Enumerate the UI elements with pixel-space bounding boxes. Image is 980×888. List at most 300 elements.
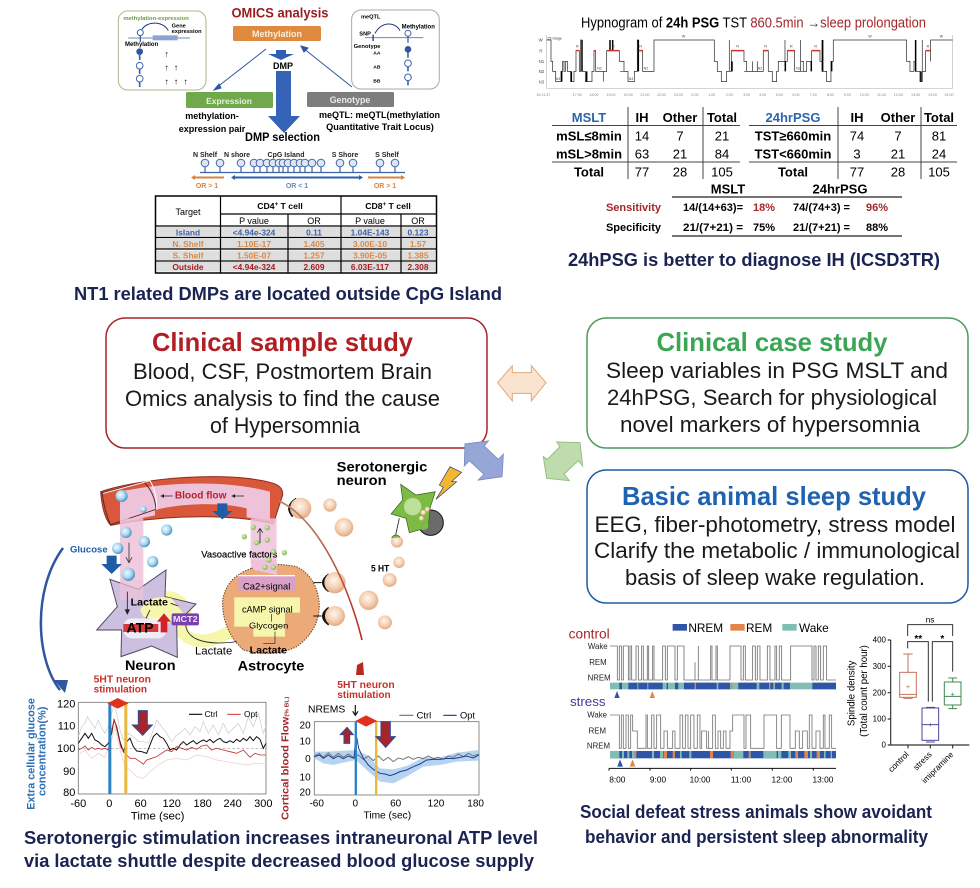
chart: extracellular glucose: 80 (63, 787, 75, 799)
diagram: CpG lollipops: OR > 1 (196, 183, 218, 190)
chart: 24h hypnogram: 23:00 (674, 93, 683, 97)
table: MSLT: mSL≤8min (556, 128, 622, 144)
box: Genotype (307, 92, 394, 107)
table: 24hrPSG: IH (850, 110, 864, 125)
chart: cortical blood flow: 10 (300, 736, 311, 747)
table: 24hrPSG: 21 (891, 146, 905, 162)
chart: extracellular glucose: 100 (57, 743, 75, 755)
chart: spindle density box plot: 200 (873, 688, 887, 697)
table: CpG target odds ratios: 1.10E-17 (237, 239, 271, 249)
chart: 24h hypnogram: 9:00 (844, 93, 851, 97)
table: sensitivity and specificity: 18% (753, 202, 775, 214)
astrocyte: cAMP signal (242, 605, 293, 615)
chart: 24h hypnogram: 15:11:37 (536, 93, 550, 97)
table: 24hrPSG: 24hrPSG (766, 110, 820, 125)
chart: 24h hypnogram: 15:00 (944, 93, 954, 97)
time axis: 10:00 (690, 775, 711, 785)
table: 24hrPSG: 28 (891, 164, 905, 180)
inset: methylation-expression: Methylation (125, 42, 159, 48)
table: MSLT: 28 (673, 164, 687, 180)
table: CpG target odds ratios: 1.257 (304, 250, 325, 260)
table: sensitivity and specificity: 24hrPSG (813, 182, 867, 196)
inset: methylation-expression: ↑ (164, 49, 169, 59)
axis labels: NREM (588, 673, 611, 682)
caption: NT1 DMPs: NT1 related DMPs are located outside CpG Island (74, 284, 502, 304)
inset: methylation-expression (118, 11, 206, 90)
arrow: DMP selection (268, 71, 300, 133)
chart: 24h hypnogram: 14:00 (928, 93, 937, 97)
table: sensitivity and specificity: Specificity (606, 222, 662, 234)
legend (673, 621, 829, 635)
diagram: CpG lollipops: OR > 1 (374, 183, 396, 190)
chart: 24h hypnogram: 10:00 (860, 93, 869, 97)
panel: basic animal sleep study: Clarify the metabolic / immunological (594, 538, 960, 563)
axis labels: REM (589, 727, 606, 736)
chart: spindle density box plot (847, 615, 969, 785)
chart: 24h hypnogram: R (790, 44, 793, 48)
table: MSLT: 21 (715, 128, 729, 144)
panel: clinical sample study: of Hypersomnia (210, 413, 361, 438)
table: MSLT: mSL>8min (556, 146, 622, 162)
y axis title: Extra cellular glucose (26, 698, 38, 810)
panel: clinical case study: novel markers of hypersomnia (620, 412, 921, 437)
table: CpG target odds ratios: OR (307, 216, 321, 226)
inset: meQTL: AB (373, 65, 381, 71)
chart: 24h hypnogram: R (539, 48, 542, 53)
arrow: orange double (498, 366, 546, 401)
table: MSLT: 77 (635, 164, 649, 180)
table: CpG target odds ratios: T cell (278, 201, 303, 211)
table: 24hrPSG: 7 (894, 128, 902, 144)
table: CpG target odds ratios: <4.94e-324 (233, 262, 276, 272)
chart: 24h hypnogram: 17:00 (573, 93, 582, 97)
chart: extracellular glucose: 60 (135, 798, 147, 810)
label: 5HT stimulation (337, 680, 395, 701)
chart: spindle density box plot: 100 (873, 715, 887, 724)
chart: cortical blood flow: 120 (428, 799, 445, 810)
chart: extracellular glucose: Ctrl (205, 709, 218, 719)
diagram: CpG lollipops: S Shore (332, 152, 358, 159)
inset: meQTL: Genotype (354, 44, 381, 50)
table: 24hrPSG: 77 (850, 164, 864, 180)
chart: cortical blood flow (281, 680, 484, 821)
table: CpG target odds ratios: + (383, 202, 387, 208)
table: sensitivity and specificity: 88% (866, 222, 888, 234)
time axis (609, 768, 836, 785)
legend: NREM (688, 621, 723, 635)
chart: spindle density box plot: + (951, 689, 955, 698)
table: 24hrPSG: 81 (932, 128, 946, 144)
chart: extracellular glucose: 120 (162, 798, 181, 810)
box: Methylation (233, 26, 321, 41)
chart: 24h hypnogram: 3:00 (743, 93, 750, 97)
chart: cortical blood flow: Ctrl (417, 710, 431, 720)
caption: 24hPSG: 24hPSG is better to diagnose IH (ICSD3TR) (568, 250, 940, 270)
chart: 24h hypnogram: N2 (644, 66, 648, 70)
label: control: control (569, 627, 610, 642)
label: 5HT stimulation: stimulation (337, 690, 391, 701)
neuron: ATP (127, 620, 153, 636)
y axis title: concentration(%) (37, 706, 49, 796)
chart: spindle density box plot: imipramine (920, 749, 956, 785)
chart: 24h hypnogram: 25 Stage (547, 36, 562, 40)
chart: 24h hypnogram: R (612, 44, 615, 48)
table: CpG target odds ratios: CD4 (257, 201, 275, 211)
label: 5HT stimulation (94, 675, 151, 695)
axis labels: NREM (587, 742, 610, 751)
table: sensitivity and specificity: 14/(14+63)= (683, 202, 743, 214)
table: MSLT: Other (663, 110, 697, 125)
panel: clinical sample study: Clinical sample study (152, 327, 414, 357)
chart: 24h hypnogram: R (814, 44, 817, 48)
table: 24hrPSG (749, 107, 957, 180)
inset: meQTL: AA (373, 50, 381, 56)
chart: 24h hypnogram: W (539, 38, 544, 43)
panel: clinical case study: Clinical case study (656, 327, 888, 357)
caption: social defeat stress: behavior and persistent sleep abnormality (585, 827, 929, 847)
blood vessel: Blood flow (175, 490, 227, 501)
chart: 24h hypnogram: R (576, 44, 579, 48)
inset: meQTL: BB (373, 79, 381, 85)
chart: spindle density box plot: + (928, 720, 932, 729)
chart: 24h hypnogram: 20:00 (624, 93, 633, 97)
chart: cortical blood flow: Time (sec) (363, 810, 411, 821)
axis labels (587, 642, 611, 751)
box: Methylation: Methylation (252, 29, 302, 39)
legend: REM (746, 621, 772, 635)
arc: glucose to chart (41, 548, 68, 693)
chart: 24h hypnogram: 18:00 (589, 93, 599, 97)
table: CpG target odds ratios: 1.385 (408, 250, 429, 260)
inset: methylation-expression: ↑ (164, 63, 169, 73)
chart: extracellular glucose: 240 (223, 798, 242, 810)
chart: cortical blood flow: 10 (300, 772, 311, 783)
neuron: Lactate (131, 598, 168, 609)
diagram: CpG lollipops: CpG Island (268, 152, 304, 159)
panel: clinical sample study: Blood, CSF, Postmortem Brain (133, 359, 432, 384)
yellow lactate shuttle (147, 597, 257, 641)
astrocyte: Lactate (250, 645, 287, 656)
chart: 24h hypnogram: 19:00 (606, 93, 616, 97)
chart: spindle density box plot: (Total count per hour) (859, 645, 870, 737)
panel: basic animal sleep study: Basic animal sleep study (622, 481, 927, 511)
table: 24hrPSG: TST≥660min (755, 128, 831, 144)
chart: 24h hypnogram: 8:00 (827, 93, 834, 97)
chart: 24h hypnogram: N2 (597, 66, 602, 70)
chart: extracellular glucose: Opt (244, 709, 258, 719)
time axis: 11:00 (731, 775, 751, 785)
chart: cortical blood flow: -60 (309, 799, 324, 810)
table: sensitivity and specificity: 21/(7+21) = (683, 222, 743, 234)
text: meQTL definition: meQTL: meQTL(methylation (319, 110, 440, 120)
box: Expression (186, 92, 273, 108)
chart: extracellular glucose: 0 (106, 798, 112, 810)
diagram: serotonergic neuron: Serotonergic (337, 460, 428, 475)
chart: cortical blood flow: NREMS (308, 705, 345, 716)
caption: social defeat stress: Social defeat stress animals show avoidant (580, 802, 932, 822)
table: 24hrPSG: Total (778, 164, 808, 180)
chart: 24h hypnogram: 13:00 (911, 93, 920, 97)
text: methylation-expression pair: expression pair (179, 124, 246, 134)
table: CpG target odds ratios: S. Shelf (173, 250, 204, 260)
table: CpG target odds ratios: 3.00E-10 (353, 239, 387, 249)
diagram: CpG lollipops: S Shelf (375, 152, 400, 159)
neuron (97, 570, 199, 657)
diagram: CpG lollipops: OR < 1 (286, 183, 308, 190)
glucose balls (112, 490, 172, 581)
panel: clinical case study: Sleep variables in PSG MSLT and (606, 358, 948, 383)
legend: Wake (799, 621, 829, 635)
chart: 24h hypnogram: N2 (796, 66, 801, 70)
chart: 24h hypnogram: 11:00 (877, 93, 886, 97)
inset: methylation-expression: ↑ (174, 63, 178, 73)
table: MSLT: 63 (635, 146, 649, 162)
y axis title: Cortical blood Flow(% BL) (281, 697, 292, 820)
caption: social defeat stress (580, 802, 932, 847)
chart: spindle density box plot: Spindle density (847, 660, 858, 726)
table: CpG target odds ratios: P value (239, 216, 269, 226)
chart: 24h hypnogram: 1:00 (708, 93, 715, 97)
axis labels: Wake (588, 642, 608, 651)
panel: clinical sample study (106, 318, 487, 448)
table: CpG target odds ratios: 1.50E-07 (237, 250, 271, 260)
caption: serotonergic stimulation: via lactate shuttle despite decreased blood glucose supply (24, 851, 535, 871)
blood vessel (101, 477, 283, 525)
chart: extracellular glucose: Time (sec) (131, 811, 184, 823)
chart: cortical blood flow: 60 (390, 799, 402, 810)
chart: spindle density box plot: ** (914, 634, 922, 645)
chart: extracellular glucose (26, 675, 272, 823)
label: DMP: DMP (273, 61, 293, 71)
chart: 24h hypnogram: 12:00 (894, 93, 903, 97)
label: Vasoactive factors: Vasoactive factors (201, 549, 278, 559)
heading: hypnogram title: Hypnogram of 24h PSG TST 860.5min →sleep prolongation (581, 16, 926, 32)
table: CpG target odds ratios: OR (411, 216, 425, 226)
table: MSLT: 14 (635, 128, 649, 144)
label: stress: stress (570, 694, 606, 709)
label: 5HT stimulation: stimulation (94, 684, 147, 695)
axis labels: REM (589, 658, 607, 667)
chart: 24h hypnogram: R (639, 44, 642, 48)
inset: methylation-expression: ↑ (164, 76, 169, 86)
chart: cortical blood flow: 180 (467, 799, 484, 810)
table: CpG target odds ratios: 1.405 (304, 239, 325, 249)
chart: 24h hypnogram: N2 (758, 66, 762, 70)
table: sensitivity and specificity: 75% (753, 222, 775, 234)
table: MSLT: 7 (676, 128, 684, 144)
table: sensitivity and specificity: MSLT (711, 182, 745, 196)
diagram: serotonergic neuron: neuron (337, 473, 387, 488)
label: Glucose: Glucose (70, 544, 108, 554)
table: 24hrPSG: 24 (932, 146, 946, 162)
time axis: 12:00 (772, 775, 793, 785)
chart: 24h hypnogram: R (764, 44, 767, 48)
chart: 24h hypnogram: 2:00 (726, 93, 733, 97)
arrow: glucose down (101, 556, 122, 574)
panel: clinical case study: 24hPSG, Search for physiological (607, 385, 937, 410)
chart: 24h hypnogram: N3 (556, 77, 560, 81)
table: CpG target odds ratios: 1.57 (410, 239, 426, 249)
chart: spindle density box plot: 300 (873, 662, 887, 671)
y axis title (26, 698, 49, 810)
caption: serotonergic stimulation (24, 828, 538, 871)
arrow: blue double (464, 441, 503, 480)
table: 24hrPSG: 105 (928, 164, 950, 180)
chart: 24h hypnogram (536, 35, 954, 97)
table: MSLT: MSLT (572, 110, 606, 125)
chart: 24h hypnogram: 7:00 (810, 93, 817, 97)
time axis: 8:00 (609, 775, 626, 785)
chart: extracellular glucose: 180 (193, 798, 212, 810)
chart: sleep stage traces (569, 621, 836, 785)
chart: 24h hypnogram: N3 (539, 79, 545, 84)
box: Expression: Expression (206, 96, 252, 106)
table: 24hrPSG: TST<660min (755, 146, 832, 162)
label: Neuron: Neuron (125, 657, 176, 673)
panel: basic animal sleep study: basis of sleep wake regulation. (625, 565, 925, 590)
text: methylation-expression pair: methylation- (185, 111, 239, 121)
table: MSLT: Total (574, 164, 604, 180)
chart: 24h hypnogram: W (940, 35, 944, 39)
chart: cortical blood flow: 0 (353, 799, 359, 810)
chart: extracellular glucose: 120 (57, 698, 75, 710)
diagram: serotonergic neuron: 5 HT (371, 564, 390, 574)
inset: methylation-expression: Gene (172, 23, 186, 29)
pink perfusion columns (120, 518, 277, 607)
inset: meQTL (352, 10, 439, 89)
text: meQTL definition (319, 110, 440, 132)
chart: 24h hypnogram: R (736, 44, 739, 48)
chart: cortical blood flow: Opt (460, 710, 475, 720)
stress strip (610, 751, 836, 758)
chart: extracellular glucose: 90 (63, 766, 75, 778)
arrow: glucose uptake (126, 543, 132, 563)
table: CpG target odds ratios: CD8 (365, 201, 383, 211)
chart: 24h hypnogram: 21:00 (640, 93, 650, 97)
chart: 24h hypnogram: W (682, 35, 686, 39)
chart: 24h hypnogram: N1 (539, 59, 545, 64)
box: Genotype: Genotype (330, 95, 370, 105)
table: CpG target odds ratios: 6.03E-117 (351, 262, 389, 272)
chart: extracellular glucose: -60 (70, 798, 86, 810)
chart: 24h hypnogram: 0:00 (691, 93, 699, 97)
diagram: CpG lollipops (191, 152, 405, 190)
table: CpG target odds ratios (155, 196, 436, 273)
heading: OMICS analysis: OMICS analysis (232, 4, 329, 20)
chart: spindle density box plot: + (906, 682, 910, 691)
table: MSLT: 84 (715, 146, 729, 162)
inset: meQTL: meQTL (361, 14, 381, 20)
diagram: CpG lollipops: N Shelf (193, 152, 218, 159)
table: 24hrPSG: 3 (853, 146, 861, 162)
panel: basic animal sleep study: EEG, fiber-photometry, stress model (594, 512, 956, 537)
table: MSLT: 105 (711, 164, 733, 180)
table: CpG target odds ratios: 2.609 (304, 262, 325, 272)
table: MSLT: Total (707, 110, 737, 125)
diagram: CpG lollipops: N shore (224, 152, 250, 159)
table: CpG target odds ratios: 2.308 (408, 262, 429, 272)
table: 24hrPSG: 74 (850, 128, 864, 144)
caption: serotonergic stimulation: Serotonergic stimulation increases intraneuronal ATP level (24, 828, 538, 848)
table: 24hrPSG: Other (881, 110, 915, 125)
chart: 24h hypnogram: R (927, 44, 930, 48)
table: sensitivity and specificity: 96% (866, 202, 888, 214)
table: sensitivity and specificity: 21/(7+21) = (793, 222, 850, 234)
inset: methylation-expression: ↑ (174, 76, 178, 86)
text: meQTL definition: Quantitative Trait Locus) (326, 122, 434, 132)
panel: clinical case study (587, 318, 968, 448)
table: MSLT: IH (636, 110, 648, 125)
chart: spindle density box plot: 400 (873, 636, 887, 645)
astrocyte: Glycogen (249, 621, 288, 631)
chart: 24h hypnogram: N2 (539, 69, 545, 74)
time axis: 13:00 (813, 775, 834, 785)
panel: hypnogram and diagnostics (536, 16, 957, 270)
inset: methylation-expression: expression (172, 29, 202, 35)
chart: 24h hypnogram: 22:00 (657, 93, 666, 97)
chart: 24h hypnogram: N3 (629, 77, 633, 81)
inset: meQTL: SNP (359, 31, 371, 37)
table: CpG target odds ratios: N. Shelf (172, 239, 204, 249)
time axis: 9:00 (650, 775, 666, 785)
control trace (610, 646, 836, 680)
table: CpG target odds ratios: Island (176, 228, 200, 238)
table: CpG target odds ratios: + (275, 202, 279, 208)
table: CpG target odds ratios: 0.123 (408, 228, 429, 238)
table: CpG target odds ratios: Outside (172, 262, 204, 272)
arrow: vasoactive up (257, 528, 263, 543)
arrow: green double (543, 442, 583, 481)
chart: extracellular glucose: 110 (58, 721, 75, 733)
vasoactive dots (242, 525, 287, 570)
neuron: MCT2 (173, 614, 198, 624)
table: CpG target odds ratios: 3.90E-05 (353, 250, 387, 260)
table: CpG target odds ratios: T cell (386, 201, 411, 211)
table: MSLT: 21 (673, 146, 687, 162)
chart: cortical blood flow: 0 (305, 754, 311, 765)
chart: 24h hypnogram: 5:00 (776, 93, 783, 97)
chart: cortical blood flow: 20 (300, 721, 311, 732)
table: 24hrPSG: Total (924, 110, 954, 125)
table: CpG target odds ratios: 1.04E-143 (351, 228, 390, 238)
label: Lactate extracellular: Lactate (195, 646, 232, 658)
panel: basic animal sleep study (587, 470, 968, 603)
diagram: serotonergic neuron (337, 460, 462, 629)
panel: OMICS analysis (74, 4, 502, 304)
arc: serotonin to chart (279, 501, 364, 675)
label: 5HT stimulation: 5HT neuron (94, 675, 151, 686)
chart: extracellular glucose: 300 (254, 798, 272, 810)
inset: methylation-expression: methylation-expression (123, 16, 189, 22)
chart: 24h hypnogram: 4:00 (759, 93, 766, 97)
inset: meQTL: Methylation (402, 25, 435, 31)
astrocyte (186, 560, 319, 656)
text: methylation-expression pair (179, 111, 246, 134)
astrocyte: Ca2+signal (243, 582, 290, 592)
chart: 24h hypnogram: 6:00 (792, 93, 800, 97)
panel: clinical sample study: Omics analysis to find the cause (125, 386, 440, 411)
table: sensitivity and specificity (606, 182, 902, 236)
arrow: DMP small (268, 50, 294, 60)
table: CpG target odds ratios: P value (355, 216, 385, 226)
markers (614, 691, 655, 767)
label: DMP selection: DMP selection (245, 130, 320, 144)
stress trace (610, 715, 836, 748)
synapses (290, 498, 353, 626)
chart: 24h hypnogram: W (868, 35, 872, 39)
chart: spindle density box plot: control (886, 749, 911, 774)
chart: spindle density box plot: stress (911, 749, 934, 772)
